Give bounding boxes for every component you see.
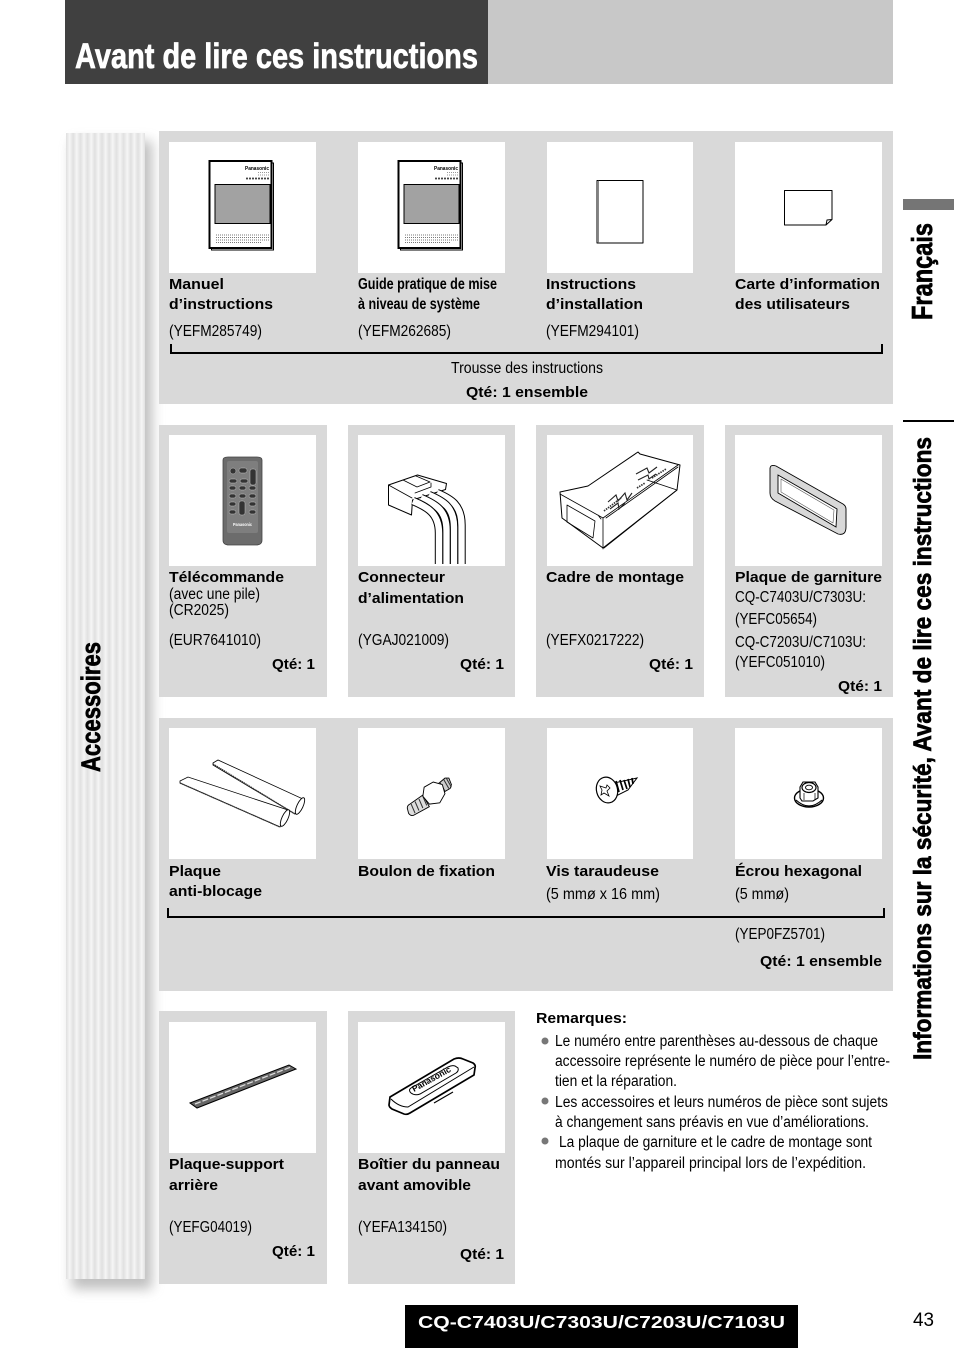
item: trim plate: CQ-C7403U/C7303U: <box>735 589 866 606</box>
model number footer: CQ-C7403U/C7303U/C7203U/C7103U <box>418 1312 785 1332</box>
model number footer <box>405 1305 798 1348</box>
item: manual: Manuel <box>169 276 224 293</box>
item: removal plate: anti-blocage <box>169 883 262 900</box>
icon: operating manual: Panasonic <box>245 166 269 172</box>
icon: upgrade guide <box>398 161 462 250</box>
icon: remote <box>223 457 262 545</box>
item: manual: d’instructions <box>169 296 273 313</box>
panel: removable face plate case <box>348 1011 515 1284</box>
hardware kit quantity: Qté: 1 ensemble <box>760 953 882 970</box>
panel: rear support strap <box>159 1011 327 1284</box>
notes: à changement sans préavis en vue d’améliorations. <box>555 1114 869 1131</box>
item: mounting bolt: Boulon de fixation <box>358 863 495 880</box>
icon: removal plates <box>180 760 307 827</box>
item: information card: des utilisateurs <box>735 296 850 313</box>
item: hex nut <box>735 863 862 903</box>
item: mounting collar: Qté: 1 <box>649 656 693 673</box>
item: hex nut: (5 mmø) <box>735 886 789 903</box>
icon: face plate case <box>389 1058 475 1114</box>
item: face plate case: Boîtier du panneau <box>358 1156 500 1173</box>
panel: hardware <box>159 718 893 991</box>
item: hex nut: Écrou hexagonal <box>735 863 862 880</box>
item: rear support strap: (YEFG04019) <box>169 1219 252 1236</box>
page number: 43 <box>913 1310 934 1331</box>
item: guide: (YEFM262685) <box>358 323 451 340</box>
item: face plate case: (YEFA134150) <box>358 1219 447 1236</box>
item: trim plate: (YEFC05654) <box>735 611 817 628</box>
icon: user information card <box>784 190 832 225</box>
item: tapping screw <box>546 863 660 903</box>
item: removal plate: Plaque <box>169 863 221 880</box>
item: remote control: Télécommande <box>169 569 284 586</box>
notes: Le numéro entre parenthèses au-dessous de chaque <box>555 1033 878 1050</box>
language tab <box>903 199 954 320</box>
icon: rear support strap <box>190 1065 296 1108</box>
hardware kit quantity <box>735 926 882 970</box>
item: information card <box>735 276 880 313</box>
panel: mounting collar <box>536 425 704 697</box>
kit quantity: Qté: 1 ensemble <box>466 384 588 401</box>
tab heading: français: Français <box>907 223 939 320</box>
item: mounting collar <box>546 569 693 673</box>
icon: remote: Panasonic <box>233 522 252 527</box>
item: power connector: (YGAJ021009) <box>358 632 449 649</box>
title: Avant de lire ces instructions <box>75 37 478 76</box>
item: guide: Guide pratique de mise <box>358 276 497 293</box>
item: power connector <box>358 569 504 673</box>
notes: Les accessoires et leurs numéros de pièce sont sujets <box>555 1094 888 1111</box>
item: rear support strap: Plaque-support <box>169 1156 284 1173</box>
notes: tien et la réparation. <box>555 1073 677 1090</box>
item: installation instructions <box>546 276 643 340</box>
item: trim plate: (YEFC051010) <box>735 654 825 671</box>
item: guide: à niveau de système <box>358 296 480 313</box>
icon: hex nut <box>794 782 824 807</box>
notes <box>536 1010 890 1172</box>
notes: Remarques: <box>536 1010 627 1027</box>
kit quantity: Trousse des instructions <box>451 360 603 377</box>
notes: montés sur l’appareil principal lors de l’expédition. <box>555 1155 866 1172</box>
item: remote control: Qté: 1 <box>272 656 315 673</box>
item: manual <box>169 276 273 340</box>
notes: accessoire représente le numéro de pièce pour l’entre- <box>555 1053 890 1070</box>
item: remote control: (avec une pile) <box>169 586 260 603</box>
hardware kit quantity: (YEP0FZ5701) <box>735 926 825 943</box>
item: rear support strap: Qté: 1 <box>272 1243 315 1260</box>
item: tapping screw: Vis taraudeuse <box>546 863 659 880</box>
item: installation instructions: Instructions <box>546 276 636 293</box>
item: removal plate <box>169 863 262 900</box>
item: face plate case: Qté: 1 <box>460 1246 504 1263</box>
kit quantity <box>451 360 603 401</box>
panel: trim plate <box>725 425 893 697</box>
item: power connector: Connecteur <box>358 569 445 586</box>
item: installation instructions: (YEFM294101) <box>546 323 639 340</box>
sidebar: accessoires <box>66 133 152 1289</box>
item: face plate case <box>358 1156 504 1263</box>
panel: power connector <box>348 425 515 697</box>
item: trim plate <box>735 569 882 695</box>
icon: mounting bolt <box>407 778 451 816</box>
item: remote control: (EUR7641010) <box>169 632 261 649</box>
item: mounting collar: Cadre de montage <box>546 569 684 586</box>
header band <box>65 0 893 84</box>
item: rear support strap: arrière <box>169 1177 218 1194</box>
icon: connector <box>388 475 462 564</box>
icon: installation booklet <box>597 180 643 243</box>
item: trim plate: Plaque de garniture <box>735 569 882 586</box>
item: rear support strap <box>169 1156 315 1260</box>
icon: mounting collar <box>560 452 680 549</box>
sidebar heading: Accessoires <box>76 642 106 772</box>
item: information card: Carte d’information <box>735 276 880 293</box>
item: power connector: Qté: 1 <box>460 656 504 673</box>
item: installation instructions: d’installation <box>546 296 643 313</box>
panel: remote control <box>159 425 327 697</box>
tab heading: section title: Informations sur la sécurité, Avant de lire ces instructions <box>909 437 937 1060</box>
panel: instructions kit <box>159 131 893 404</box>
item: power connector: d’alimentation <box>358 590 464 607</box>
item: remote control: (CR2025) <box>169 602 229 619</box>
icon: upgrade guide: Panasonic <box>434 166 458 172</box>
item: tapping screw: (5 mmø x 16 mm) <box>546 886 660 903</box>
icon: face plate case: Panasonic <box>410 1064 453 1094</box>
icon: trim plate <box>770 465 846 534</box>
item: trim plate: Qté: 1 <box>838 678 882 695</box>
notes: La plaque de garniture et le cadre de montage sont <box>559 1134 873 1151</box>
item: remote control <box>169 569 315 673</box>
icon: operating manual <box>210 161 274 250</box>
item: face plate case: avant amovible <box>358 1177 471 1194</box>
item: guide <box>358 276 497 340</box>
icon: tapping screw <box>593 775 637 805</box>
item: trim plate: CQ-C7203U/C7103U: <box>735 634 866 651</box>
item: mounting collar: (YEFX0217222) <box>546 632 644 649</box>
item: manual: (YEFM285749) <box>169 323 262 340</box>
